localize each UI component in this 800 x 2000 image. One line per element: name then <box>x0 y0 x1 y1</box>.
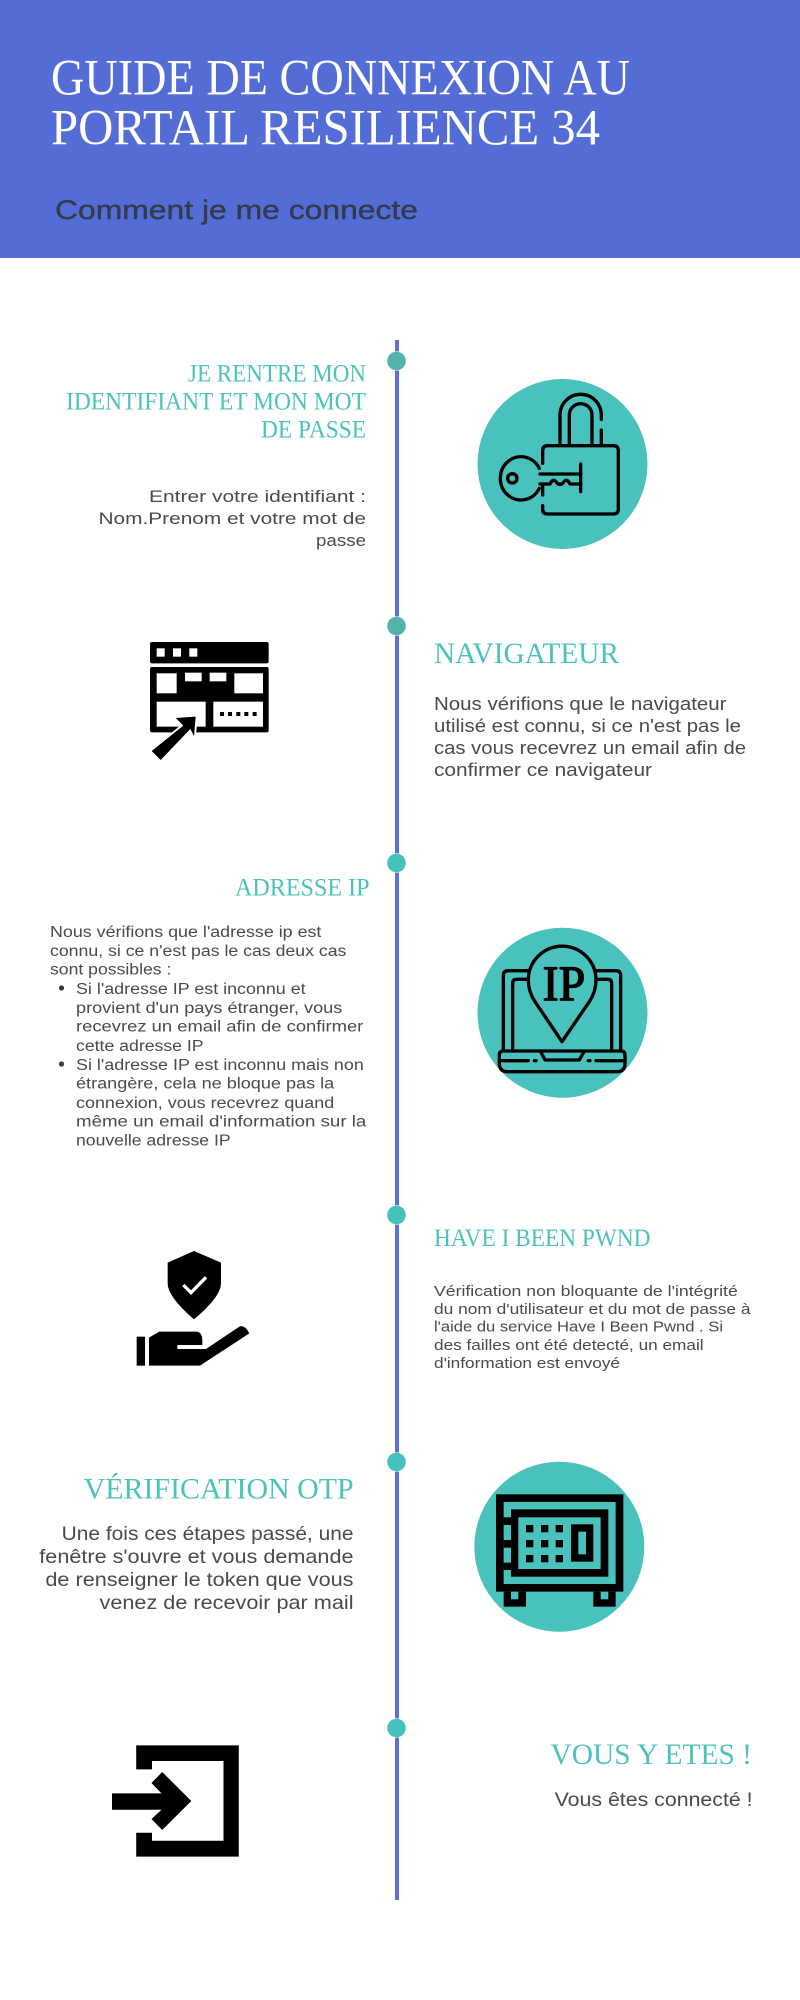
text: otp explanation: de renseigner le token que vous <box>45 1569 354 1591</box>
list: ip cases: Si l'adresse IP est inconnu mais non <box>76 1057 364 1074</box>
text: navigateur explanation: Nous vérifions que le navigateur <box>434 694 726 714</box>
text: identifiant instructions <box>98 487 366 550</box>
icon: padlock and key <box>478 379 648 549</box>
icon: browser window with arrow <box>150 642 269 760</box>
text: otp explanation <box>39 1523 354 1614</box>
text: adresse ip intro: Nous vérifions que l'adresse ip est <box>50 924 322 941</box>
list: ip cases: cette adresse IP <box>76 1038 204 1055</box>
heading: navigateur: NAVIGATEUR <box>434 637 619 670</box>
list: ip cases: Si l'adresse IP est inconnu et <box>76 981 306 998</box>
text: otp explanation: venez de recevoir par mail <box>100 1592 354 1614</box>
list: ip cases: nouvelle adresse IP <box>76 1133 231 1150</box>
title: PORTAIL RESILIENCE 34 <box>51 100 600 156</box>
list: ip cases: connexion, vous recevrez quand <box>76 1095 334 1112</box>
header banner <box>0 0 800 258</box>
panel: step 1 identifiant <box>66 360 648 550</box>
text: otp explanation: Une fois ces étapes passé, une <box>62 1523 353 1545</box>
list: ip cases <box>59 981 367 1150</box>
text: have i been pwnd explanation: l'aide du service Have I Been Pwnd . Si <box>434 1320 723 1336</box>
text: navigateur explanation: cas vous recevrez un email afin de <box>434 738 746 758</box>
text: adresse ip intro: connu, si ce n'est pas le cas deux cas <box>50 943 347 960</box>
icon: login arrow entering box <box>112 1745 239 1857</box>
text: navigateur explanation: utilisé est connu, si ce n'est pas le <box>434 716 741 736</box>
list: ip cases: provient d'un pays étranger, vous <box>76 1000 343 1017</box>
list: ip cases: recevrez un email afin de confirmer <box>76 1019 363 1036</box>
heading: je rentre mon identifiant <box>66 360 366 444</box>
title: GUIDE DE CONNEXION AU <box>51 50 630 106</box>
text: identifiant instructions: passe <box>316 531 366 550</box>
text: otp explanation: fenêtre s'ouvre et vous demande <box>39 1546 354 1568</box>
panel: step 2 navigateur <box>150 637 746 780</box>
text: have i been pwnd explanation: des failles ont été detecté, un email <box>434 1338 704 1354</box>
timeline dots <box>387 352 406 1738</box>
icon: safe <box>474 1462 644 1632</box>
list: ip cases: même un email d'information sur la <box>76 1114 367 1131</box>
panel: step 5 verification otp <box>39 1462 644 1632</box>
text: connected message: Vous êtes connecté ! <box>555 1789 753 1811</box>
text: adresse ip intro <box>50 924 347 979</box>
text: have i been pwnd explanation: Vérification non bloquante de l'intégrité <box>434 1284 738 1300</box>
heading: verification otp: VÉRIFICATION OTP <box>84 1472 354 1506</box>
panel: step 3 adresse ip <box>50 874 648 1150</box>
heading: je rentre mon identifiant: IDENTIFIANT ET MON MOT <box>66 388 366 416</box>
list: ip cases: étrangère, cela ne bloque pas la <box>76 1076 335 1093</box>
heading: je rentre mon identifiant: DE PASSE <box>261 416 366 444</box>
icon: laptop with ip location pin <box>478 928 648 1098</box>
text: have i been pwnd explanation: du nom d'utilisateur et du mot de passe à <box>434 1302 752 1318</box>
text: have i been pwnd explanation: d'information est envoyé <box>434 1356 620 1372</box>
heading: have i been pwnd: HAVE I BEEN PWND <box>434 1225 650 1252</box>
timeline <box>387 340 406 1900</box>
text: navigateur explanation: confirmer ce navigateur <box>434 760 652 780</box>
subtitle: Comment je me connecte <box>55 195 418 225</box>
text: identifiant instructions: Entrer votre identifiant : <box>149 487 366 506</box>
icon: laptop with ip location pin: IP <box>543 955 585 1011</box>
icon: hand holding shield <box>137 1251 249 1366</box>
panel: step 6 connected <box>112 1738 753 1857</box>
panel: step 4 have i been pwnd <box>137 1225 752 1372</box>
heading: adresse ip: ADRESSE IP <box>235 874 370 902</box>
text: have i been pwnd explanation <box>434 1284 752 1372</box>
text: navigateur explanation <box>434 694 746 780</box>
text: adresse ip intro: sont possibles : <box>50 962 171 979</box>
heading: vous y etes: VOUS Y ETES ! <box>550 1738 752 1771</box>
heading: je rentre mon identifiant: JE RENTRE MON <box>188 360 366 388</box>
text: identifiant instructions: Nom.Prenom et votre mot de <box>98 509 366 528</box>
title <box>51 50 630 156</box>
